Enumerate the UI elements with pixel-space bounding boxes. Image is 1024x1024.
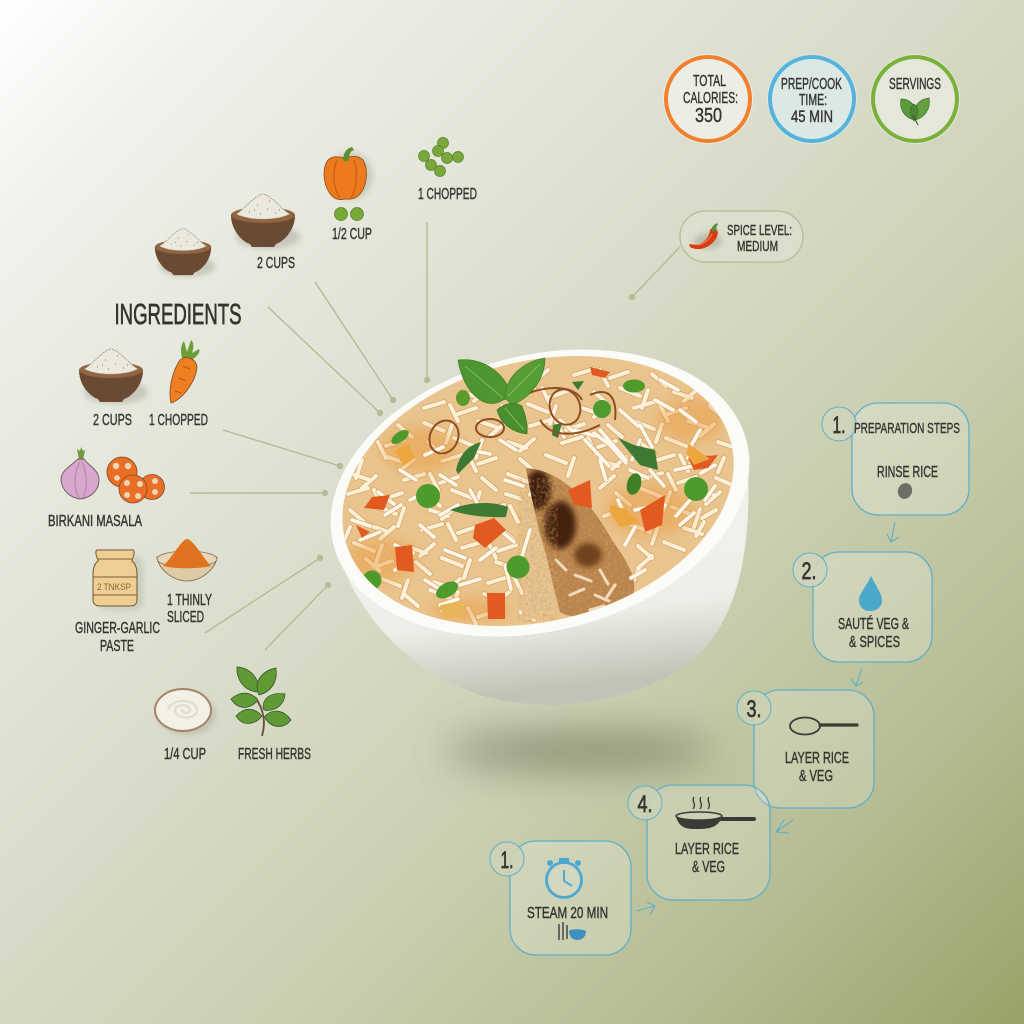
ingredient: onion and sliced vegetable	[48, 447, 164, 530]
arrow: step 5 to step 4	[637, 902, 655, 915]
cavity in the rice	[526, 468, 634, 616]
icon: carrot: 2 CUPS	[93, 412, 132, 429]
panel: preparation step 1: RINSE RICE	[877, 464, 938, 481]
ingredient: bell pepper	[324, 147, 373, 243]
ingredient: peas	[418, 138, 477, 203]
herb flecks	[450, 381, 658, 517]
rice filling	[342, 356, 734, 626]
ingredient: onion and sliced vegetable: BIRKANI MASALA	[48, 513, 142, 530]
crumbly rice wall	[518, 478, 554, 620]
panel: preparation step 4	[628, 785, 770, 900]
ingredient: ginger-garlic paste jar	[75, 550, 160, 655]
ingredient: fresh herbs	[231, 667, 311, 763]
ingredient: small rice bowl	[155, 229, 216, 277]
ingredient: ginger-garlic paste jar: GINGER-GARLIC	[75, 620, 160, 637]
floating bowl shadow	[445, 735, 715, 767]
golden spice tint	[344, 398, 724, 622]
icon: onion	[61, 447, 99, 499]
ingredient: yogurt	[154, 688, 216, 763]
ingredient: spice powder bowl: SLICED	[167, 609, 204, 626]
ingredient: peas: 1 CHOPPED	[418, 186, 477, 203]
icon: stopwatch	[546, 858, 582, 898]
panel: preparation step 1: 1.	[832, 412, 846, 439]
panel: nutrition badges	[663, 54, 960, 144]
ingredient: fresh herbs: FRESH HERBS	[238, 746, 311, 763]
ingredient: ginger-garlic paste jar: PASTE	[100, 638, 134, 655]
panel: preparation step 4: 4.	[638, 791, 652, 818]
panel: preparation step 3: & VEG	[799, 768, 833, 785]
arrow: step 1 to step 2	[887, 522, 899, 542]
panel: preparation step 2: SAUTÉ VEG &	[838, 616, 909, 633]
panel: preparation step 2: 2.	[802, 558, 816, 585]
callout: spice level: MEDIUM	[737, 238, 778, 255]
icon: rice grain	[896, 481, 914, 501]
panel: preparation step steam	[490, 841, 631, 955]
leader lines from ingredients to bowl	[190, 222, 680, 650]
ingredient: bell pepper: 1/2 CUP	[332, 226, 372, 243]
icon: carrot: 1 CHOPPED	[149, 412, 208, 429]
heading: ingredients: INGREDIENTS	[114, 299, 242, 331]
bowl body	[331, 470, 748, 705]
ingredient: spice powder bowl: 1 THINLY	[167, 592, 212, 609]
panel: preparation step 3: LAYER RICE	[785, 750, 849, 767]
panel: preparation step 2: & SPICES	[849, 634, 900, 651]
arrow: step 3 to step 4	[776, 820, 793, 833]
rice grains on top	[352, 380, 715, 605]
ingredient: rice bowl and carrot	[79, 340, 208, 429]
badge: total calories: TOTAL	[693, 73, 726, 90]
carrot pieces	[356, 367, 718, 619]
bowl rim	[300, 308, 780, 678]
badge: prep and cook time: 45 MIN	[791, 107, 833, 126]
callout: spice level	[680, 211, 803, 262]
ingredient: ginger-garlic paste jar: 2 TNKSP	[97, 582, 131, 593]
illustration: biryani bowl	[330, 350, 750, 704]
badge: total calories: 350	[695, 105, 722, 127]
panel: preparation step 2	[793, 552, 932, 662]
icon: water drop	[859, 576, 882, 611]
panel: preparation step 4: LAYER RICE	[675, 841, 739, 858]
mint sprig garnish	[458, 358, 545, 434]
badge: prep and cook time: PREP/COOK	[781, 76, 842, 93]
icon: chili pepper	[689, 223, 722, 249]
badge: servings	[870, 54, 960, 144]
green peas	[362, 380, 708, 602]
badge: prep and cook time: TIME:	[799, 92, 827, 109]
icon: orange slices	[107, 457, 164, 503]
ingredient: spice powder bowl	[157, 539, 217, 626]
panel: preparation step 1	[822, 403, 969, 515]
ingredient: rice bowl 2 cups: 2 CUPS	[257, 255, 295, 272]
badge: total calories: CALORIES:	[683, 90, 738, 107]
icon: spoon	[790, 718, 857, 734]
panel: preparation step 4: & VEG	[692, 859, 725, 876]
icon: steaming pan	[676, 797, 754, 829]
callout: spice level: SPICE LEVEL:	[727, 222, 792, 239]
panel: preparation step steam: 1.	[500, 847, 514, 874]
panel: preparation step 1: PREPARATION STEPS	[854, 420, 960, 437]
badge: total calories	[663, 54, 753, 144]
ingredient: rice bowl 2 cups	[231, 194, 300, 272]
icon: mint leaves	[901, 98, 929, 125]
fried onion rings	[424, 385, 615, 458]
panel: preparation step 3	[737, 690, 874, 808]
ingredient: yogurt: 1/4 CUP	[164, 746, 206, 763]
arrow: step 2 to step 3	[851, 668, 863, 686]
panel: preparation step 3: 3.	[746, 696, 762, 723]
badge: prep and cook time	[767, 54, 857, 144]
panel: preparation step steam: STEAM 20 MIN	[527, 905, 608, 922]
badge: servings: SERVINGS	[889, 76, 941, 93]
icon: carrot	[93, 340, 208, 429]
icon: utensils and bowl	[558, 922, 586, 940]
